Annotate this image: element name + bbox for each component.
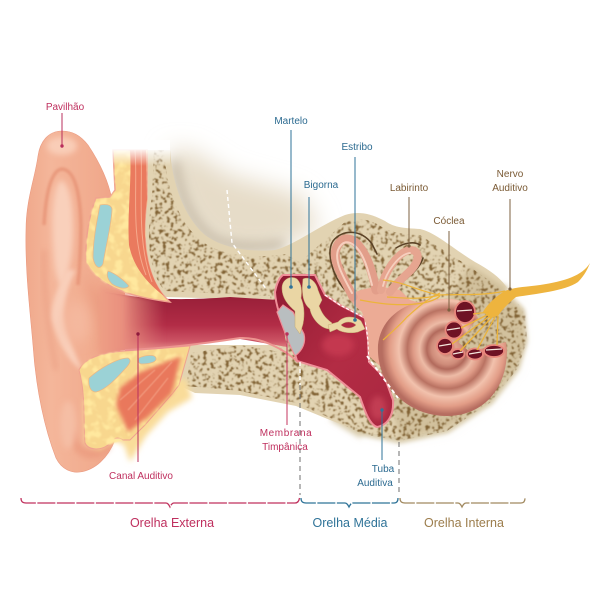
- concha shade: [78, 265, 128, 355]
- incus: [302, 278, 332, 329]
- stapes leader: [354, 157, 356, 320]
- antihelix highlight: [52, 270, 82, 370]
- labels: blue: Martelo: [274, 116, 308, 127]
- semicircular canals: [330, 232, 423, 297]
- tube pink: [335, 239, 376, 297]
- labels: brown: Cóclea: [433, 216, 465, 227]
- tympanic membrane: [277, 305, 305, 356]
- fat texture: [86, 150, 165, 300]
- top fade: [108, 140, 170, 166]
- tube highlight: [370, 396, 386, 420]
- labels: blue: Auditiva: [357, 478, 393, 489]
- inner dash: [367, 356, 398, 398]
- incus leader: [308, 197, 310, 287]
- labels: pink: [46, 102, 312, 482]
- malleus: [282, 277, 304, 334]
- upper nerve fibres: [360, 280, 505, 340]
- lower small cartilage: [138, 355, 156, 364]
- labels: brown: [390, 169, 528, 227]
- cavity highlight: [322, 334, 354, 356]
- lower muscle: [116, 356, 181, 432]
- second tube: [381, 250, 418, 292]
- pinna (outer ear): [26, 131, 128, 472]
- dark outline loop one: [330, 232, 377, 290]
- dark outline loop two: [396, 243, 423, 284]
- upper soft tissue: [86, 140, 170, 302]
- section title: middle ear: Orelha Média: [312, 516, 388, 530]
- vestibule: [350, 288, 420, 368]
- labels: pink: Canal Auditivo: [109, 471, 173, 482]
- malleus leader: [290, 130, 292, 287]
- labels: pink: Timpânica: [262, 442, 308, 453]
- white dashed boundaries: [227, 190, 398, 398]
- canal leader: [137, 333, 139, 462]
- scaphoid highlight: [52, 180, 73, 285]
- section details: [439, 310, 502, 354]
- soft bone halo: [330, 285, 530, 446]
- labels: brown: Auditivo: [492, 183, 528, 194]
- canal left fade: [100, 286, 170, 356]
- auditory nerve: [360, 263, 590, 351]
- muscle fibres: [135, 150, 152, 282]
- labels: brown: Labirinto: [390, 183, 429, 194]
- lower large cartilage: [89, 358, 130, 392]
- highlight: [337, 242, 372, 293]
- lower muscle fibres: [120, 362, 172, 420]
- nerve leader: [509, 199, 511, 289]
- labyrinth leader: [408, 197, 410, 246]
- divider 2: [398, 442, 400, 495]
- temporal bone: [140, 150, 540, 449]
- auditory canal: [100, 286, 287, 356]
- middle ear cavity: [275, 275, 393, 427]
- membrane leader: [286, 333, 288, 425]
- cochlea leader: [448, 231, 450, 310]
- dashed boundary: [325, 295, 369, 362]
- dashed section dividers: [300, 385, 399, 495]
- labels: blue: Estribo: [341, 142, 373, 153]
- concha centre: [65, 302, 91, 342]
- section title: outer ear: Orelha Externa: [130, 516, 214, 530]
- lobe highlight: [60, 401, 76, 449]
- lower small cartilage: [107, 271, 129, 288]
- bracket: middle ear: [301, 498, 398, 507]
- leader lines: [62, 113, 510, 462]
- stapes: [328, 317, 365, 333]
- labels: brown: Nervo: [497, 169, 524, 180]
- cochlea: [378, 299, 507, 416]
- upper cartilage: [93, 204, 112, 267]
- lower dash: [299, 362, 301, 385]
- leader dots: [60, 144, 512, 412]
- section title: inner ear: Orelha Interna: [424, 516, 504, 530]
- lobe shading: [70, 430, 108, 454]
- lower soft tissue: [79, 346, 192, 462]
- darker bone around the cochlea: [390, 265, 526, 438]
- ossicles: [282, 277, 365, 334]
- labels: pink: Pavilhão: [46, 102, 85, 113]
- bracket: inner ear: [400, 498, 525, 507]
- bone speckle: [140, 150, 540, 445]
- inner helix fold: [44, 169, 81, 285]
- nerve branches: [452, 312, 498, 351]
- labels: pink: Membrana: [260, 428, 312, 439]
- labels: blue: Bigorna: [304, 180, 339, 191]
- cochlear sections: [437, 301, 504, 360]
- fat texture lower: [80, 347, 185, 445]
- tube leader: [381, 410, 383, 460]
- highlight 2: [383, 253, 410, 286]
- antihelix fold shade: [44, 250, 56, 370]
- rim highlight: [47, 137, 77, 155]
- canal lower wall line: [125, 338, 298, 362]
- upper muscle: [129, 150, 164, 296]
- bracket: outer ear: [21, 498, 300, 507]
- shadow above temporal bone: [168, 150, 320, 251]
- labels: blue: Tuba: [372, 464, 395, 475]
- soft lower edge: [360, 288, 533, 449]
- labels: blue: [274, 116, 395, 489]
